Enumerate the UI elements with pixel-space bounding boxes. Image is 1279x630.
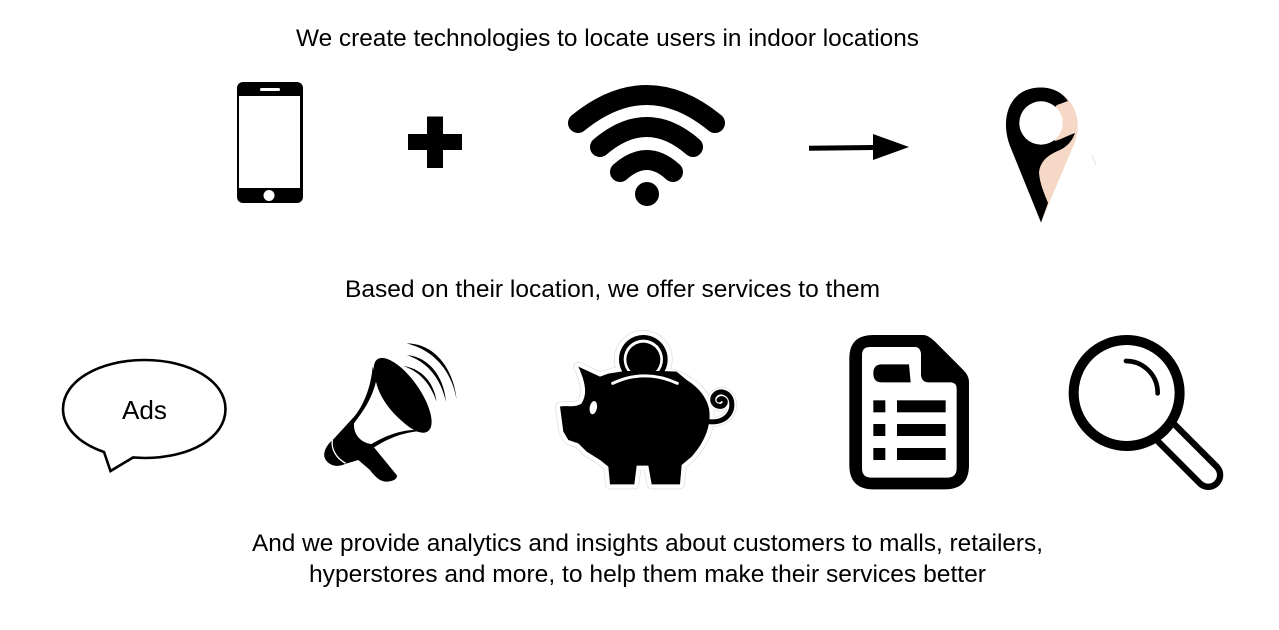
icon: smartphone	[237, 82, 303, 203]
icon: ads speech bubble	[63, 360, 226, 471]
heading: location based services: Based on their location, we offer services to them	[345, 276, 880, 303]
text block: analytics and insights: And we provide analytics and insights about customers to malls, retailers,	[252, 530, 1043, 557]
icon: piggy bank	[560, 335, 732, 484]
arrow: points to location pin	[809, 134, 909, 160]
icon: magnifying glass	[1074, 340, 1208, 475]
text block: analytics and insights	[252, 530, 1043, 588]
icon: megaphone	[324, 343, 457, 482]
icon: ads speech bubble: Ads	[122, 395, 167, 425]
icon: wifi signal	[578, 95, 715, 206]
text block: analytics and insights: hyperstores and more, to help them make their services better	[309, 561, 986, 588]
icon: document list	[849, 335, 969, 489]
heading: indoor location technologies: We create technologies to locate users in indoor locations	[296, 25, 919, 52]
icon: plus sign	[408, 116, 462, 168]
icon: location pin	[1006, 88, 1096, 222]
